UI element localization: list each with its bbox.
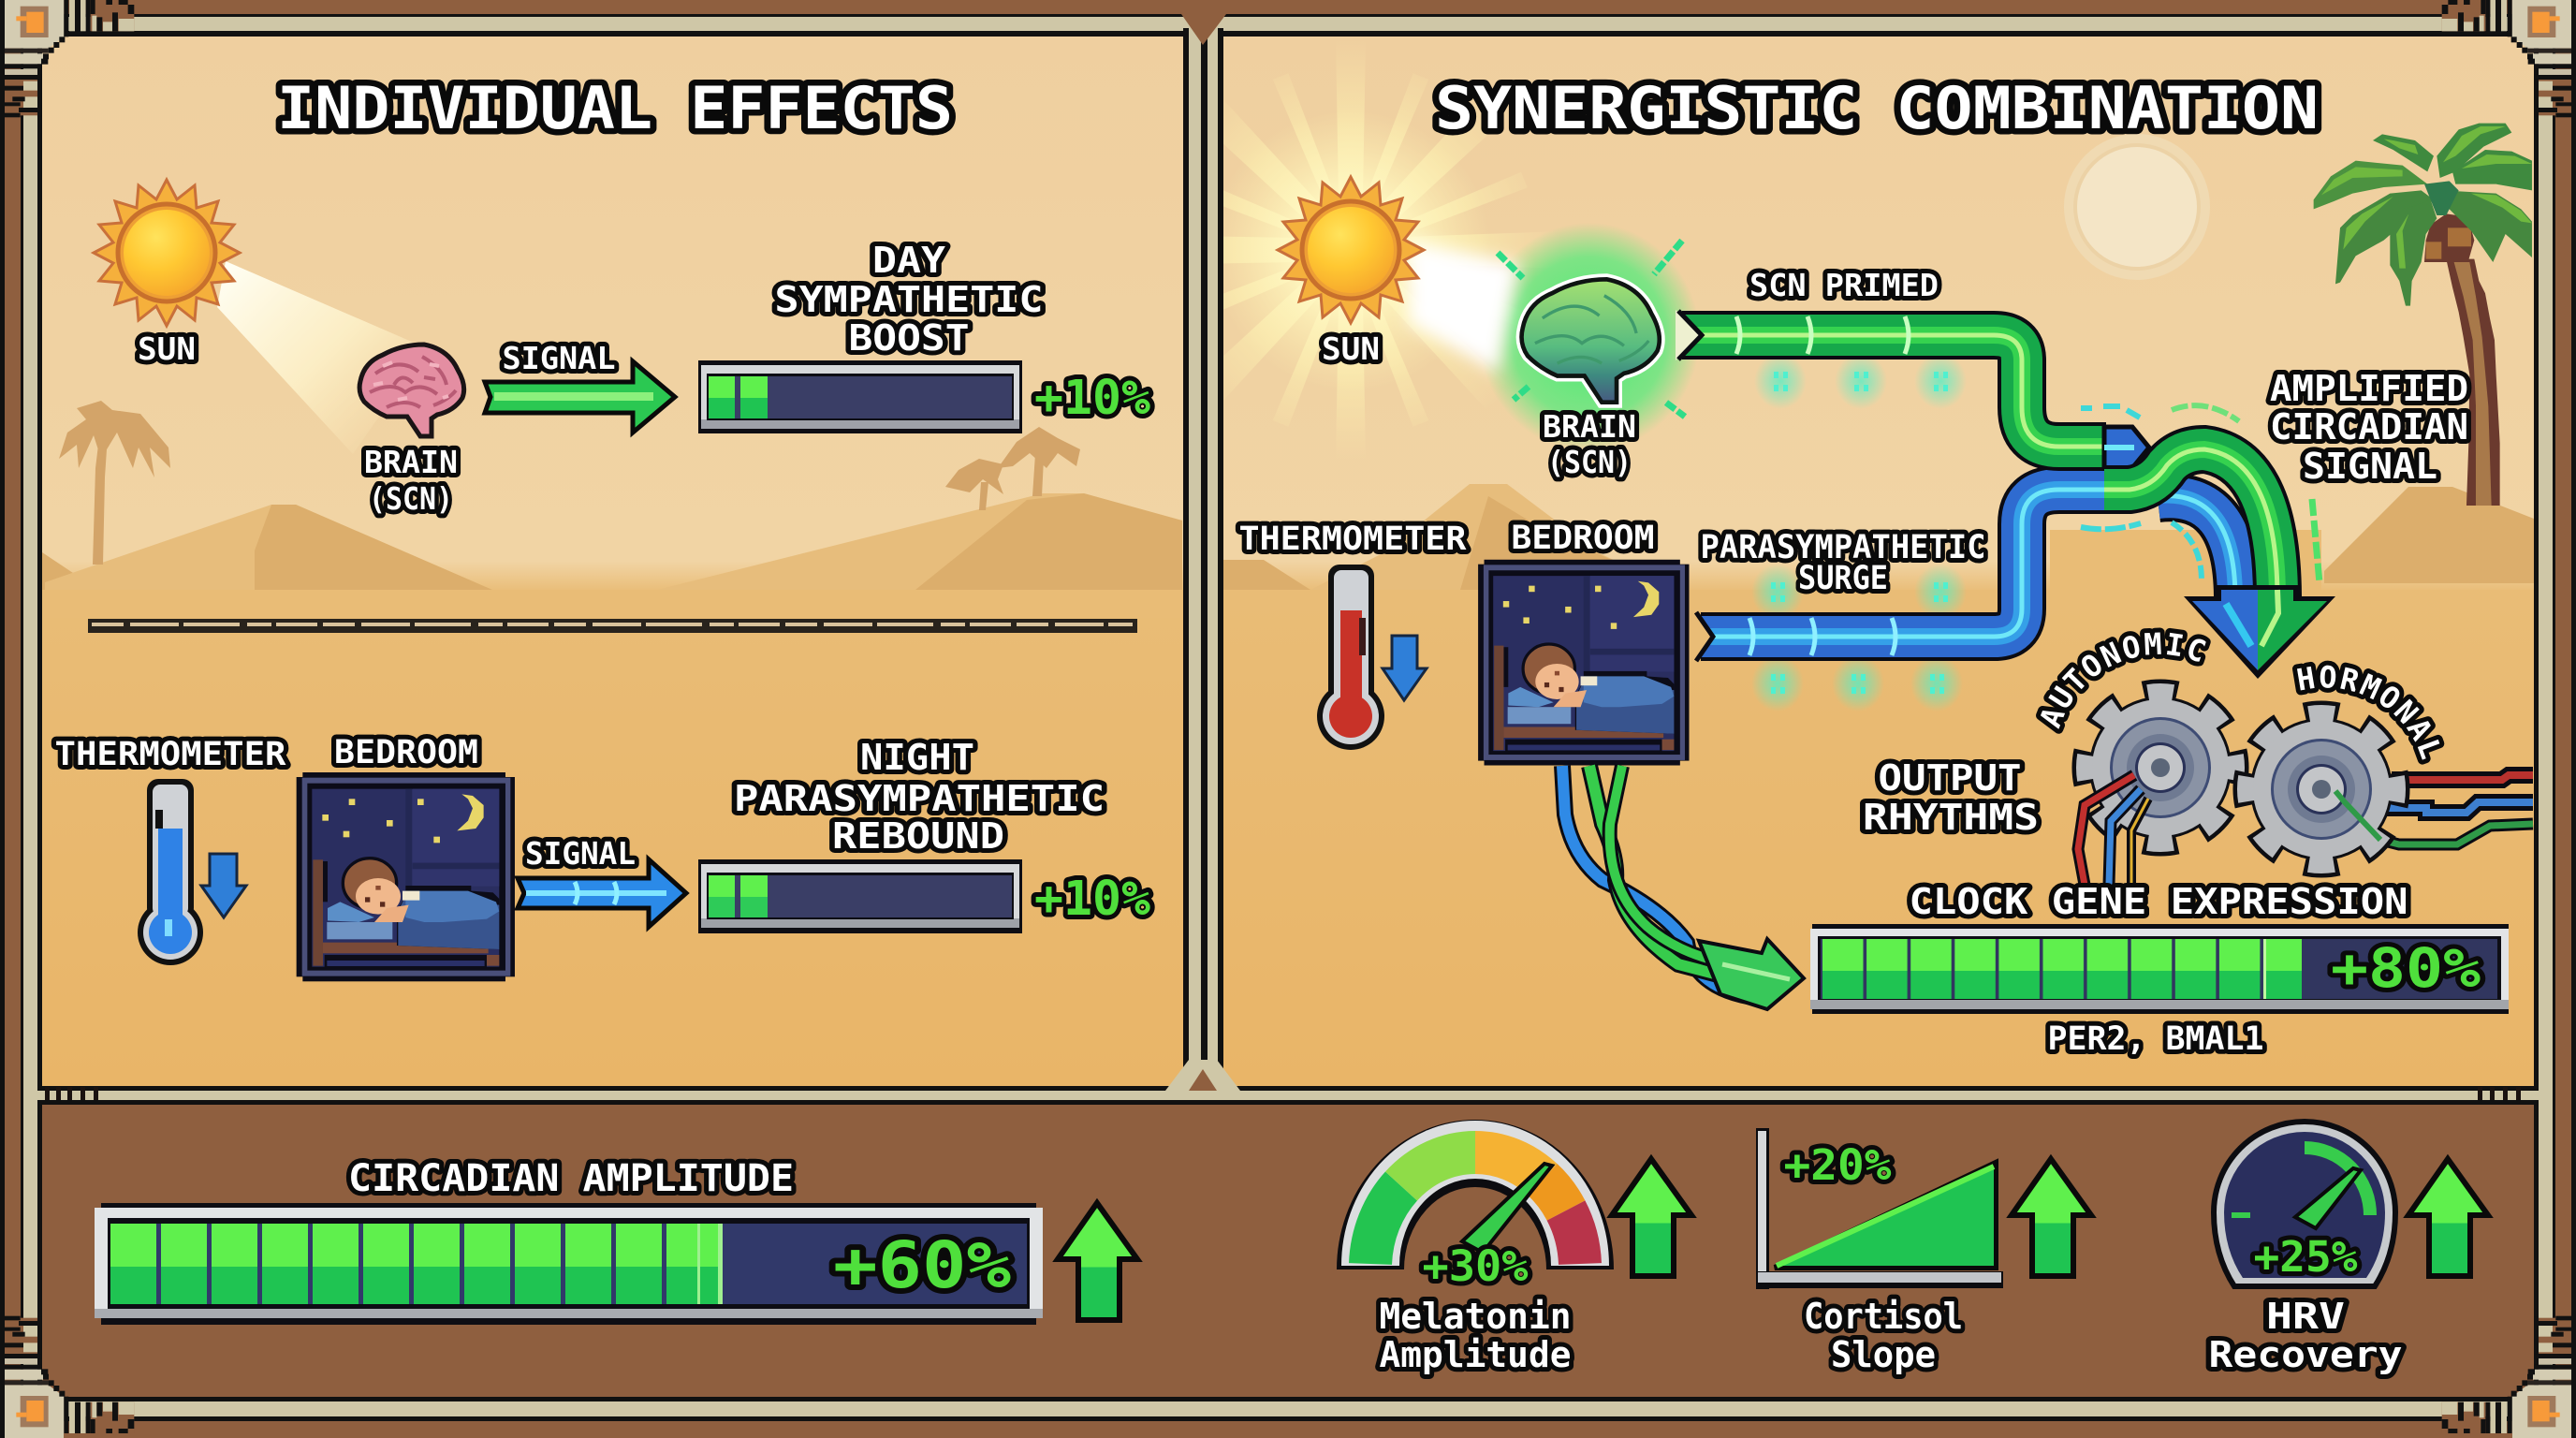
gauge: melatonin: [1370, 1150, 1580, 1269]
label: night parasympathetic rebound: PARASYMPATHETIC: [734, 778, 1105, 819]
glow sparks: green pipe: [1754, 353, 1967, 409]
label: brain scn: BRAIN: [364, 444, 458, 480]
label: thermometer right: THERMOMETER: [1239, 521, 1467, 558]
icon: sun: [94, 180, 240, 326]
label: output rhythms: [1863, 757, 2039, 838]
icon: night bedroom right: [1478, 560, 1689, 766]
label: parasympathetic surge: PARASYMPATHETIC: [1700, 529, 1986, 566]
label: day sympathetic boost: SYMPATHETIC: [775, 279, 1043, 320]
icon: night bedroom: [297, 772, 515, 981]
icon: pink brain: [359, 345, 464, 436]
label: day sympathetic boost: BOOST: [848, 317, 970, 359]
label: night parasympathetic rebound: REBOUND: [832, 815, 1004, 857]
panel: synergistic combination: [1223, 37, 2534, 1086]
label: brain right: BRAIN: [1543, 408, 1636, 445]
label: parasympathetic surge: [1700, 529, 1986, 597]
divider: day vs night: [88, 619, 1137, 633]
label: scn primed: SCN PRIMED: [1749, 267, 1939, 303]
label: parasympathetic surge: SURGE: [1798, 560, 1888, 597]
arrow: up cortisol: [2012, 1159, 2091, 1276]
value: +20%: +20%: [1784, 1140, 1891, 1190]
icon: primed green brain: [1498, 241, 1685, 417]
arrow: up hrv: [2408, 1159, 2488, 1276]
arrow: temperature down right: [1383, 636, 1427, 700]
label: signal day: SIGNAL: [502, 340, 616, 376]
glow sparks: blue pipe: [1751, 564, 1967, 712]
label: day sympathetic boost: DAY: [872, 240, 945, 281]
icon: hormonal gear: [2234, 702, 2408, 876]
label: output rhythms: RHYTHMS: [1863, 797, 2039, 838]
light beam: sun to brain: [217, 261, 427, 454]
arrow: temperature down left: [201, 854, 246, 917]
label: output rhythms: OUTPUT: [1878, 757, 2022, 799]
panel: summary metrics: [0, 1060, 2576, 1438]
label: melatonin amplitude: [1380, 1296, 1571, 1375]
value: +80%: +80%: [2331, 936, 2481, 1000]
label: cortisol slope: Slope: [1831, 1334, 1936, 1375]
label: day sympathetic boost: [775, 240, 1043, 359]
label: night parasympathetic rebound: NIGHT: [860, 737, 974, 778]
label: clock gene expression: CLOCK GENE EXPRESSION: [1910, 881, 2408, 922]
label: hrv recovery: HRV: [2266, 1296, 2345, 1337]
label: per2 bmal1: PER2, BMAL1: [2048, 1020, 2263, 1058]
desert background: right panel: [1223, 484, 2534, 610]
label: sun right: SUN: [1322, 330, 1380, 367]
icon: warm thermometer: [1317, 565, 1384, 750]
arrow: merged amplified signal: [2081, 405, 2335, 679]
cables: bedroom to clock genes: [1562, 766, 1804, 1009]
label: bedroom: BEDROOM: [334, 734, 478, 771]
arrow: up circadian: [1058, 1203, 1137, 1320]
value: +60%: +60%: [833, 1228, 1012, 1303]
value: +30%: +30%: [1423, 1241, 1528, 1291]
label: hrv recovery: [2209, 1296, 2402, 1375]
wires: output rhythm cables: [2078, 775, 2148, 885]
chart: cortisol slope: [1756, 1128, 2003, 1289]
value: +10% day: +10%: [1034, 371, 1150, 426]
label: thermometer: THERMOMETER: [54, 736, 286, 773]
label: amplified circadian signal: AMPLIFIED: [2270, 368, 2468, 409]
label: bedroom right: BEDROOM: [1511, 520, 1655, 557]
sun glow and rays: [1223, 78, 1522, 419]
gauge: hrv: [2214, 1122, 2395, 1286]
curved label: hormonal: HORMONAL: [2292, 661, 2445, 765]
label: amplified circadian signal: [2270, 368, 2468, 487]
pipe: parasympathetic surge (blue): [1685, 490, 2106, 662]
wires: gear to right edge: [2380, 775, 2533, 844]
pipe: scn primed (green): [1676, 310, 2106, 447]
label: cortisol slope: [1804, 1296, 1963, 1375]
icon: palm tree: [2314, 124, 2532, 506]
light beam: sun to brain (white): [1409, 242, 1518, 373]
label: hrv recovery: Recovery: [2209, 1334, 2402, 1375]
progress bar: clock gene expression: [1810, 924, 2509, 1014]
value: +25%: +25%: [2254, 1232, 2357, 1282]
title: synergistic combination: SYNERGISTIC COMBINATION: [1435, 74, 2319, 142]
curved label: autonomic: AUTONOMIC: [2036, 627, 2211, 734]
value: +10% night: +10%: [1034, 872, 1150, 927]
icon: sun right: [1278, 177, 1424, 323]
pale second sun: [2064, 134, 2210, 280]
desert background: left panel: [42, 401, 1183, 618]
label: melatonin amplitude: Amplitude: [1380, 1334, 1571, 1375]
label: scn right: (SCN): [1547, 444, 1632, 480]
label: signal night: SIGNAL: [525, 835, 636, 872]
progress bar: night rebound: [698, 859, 1022, 933]
arrow: up melatonin: [1612, 1159, 1691, 1276]
label: amplified circadian signal: SIGNAL: [2303, 446, 2437, 487]
label: sun: SUN: [138, 330, 196, 367]
brain green glow: [1479, 223, 1700, 451]
arrow: blue signal: [518, 859, 686, 927]
label: amplified circadian signal: CIRCADIAN: [2270, 406, 2468, 448]
icon: cold thermometer: [138, 779, 203, 965]
title: individual effects: INDIVIDUAL EFFECTS: [277, 74, 953, 142]
icon: autonomic gear: [2073, 681, 2247, 855]
progress bar: day boost: [698, 360, 1022, 433]
arrow: green signal: [485, 361, 675, 433]
bottom frame bars: [0, 1060, 2576, 1438]
progress bar: circadian amplitude: [95, 1203, 1043, 1325]
label: circadian amplitude: CIRCADIAN AMPLITUDE: [348, 1157, 794, 1200]
label: cortisol slope: Cortisol: [1804, 1296, 1963, 1337]
panel: individual effects: [42, 37, 1183, 1086]
label: melatonin amplitude: Melatonin: [1380, 1296, 1571, 1337]
label: scn: (SCN): [369, 480, 453, 517]
label: night parasympathetic rebound: [734, 737, 1105, 857]
wire: green over hormonal gear: [2335, 791, 2380, 840]
